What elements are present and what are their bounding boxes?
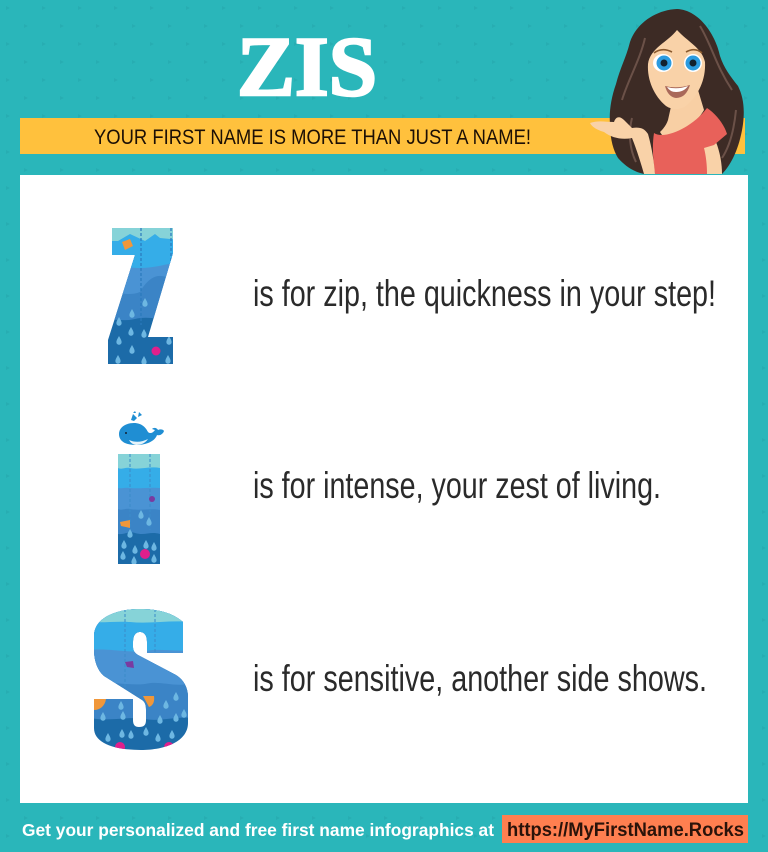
left eye [653,54,673,72]
right arm [703,142,722,174]
title: ZIS [237,20,377,114]
letter S [94,609,188,750]
footer call to action: Get your personalized and free first name infographics at [22,820,494,840]
right eye [684,54,702,72]
letter Z [108,228,173,364]
footer link badge: https://MyFirstName.Rocks [507,820,744,841]
line for I: is for intense, your zest of living. [253,465,661,506]
mascot: woman presenting [590,9,744,174]
white content panel [20,175,748,803]
whale icon [119,411,164,445]
banner [20,118,745,154]
red shirt [653,108,727,174]
banner: YOUR FIRST NAME IS MORE THAN JUST A NAME! [94,126,531,149]
smile [665,85,690,98]
arm and hand [590,117,655,174]
letter I [118,454,160,565]
